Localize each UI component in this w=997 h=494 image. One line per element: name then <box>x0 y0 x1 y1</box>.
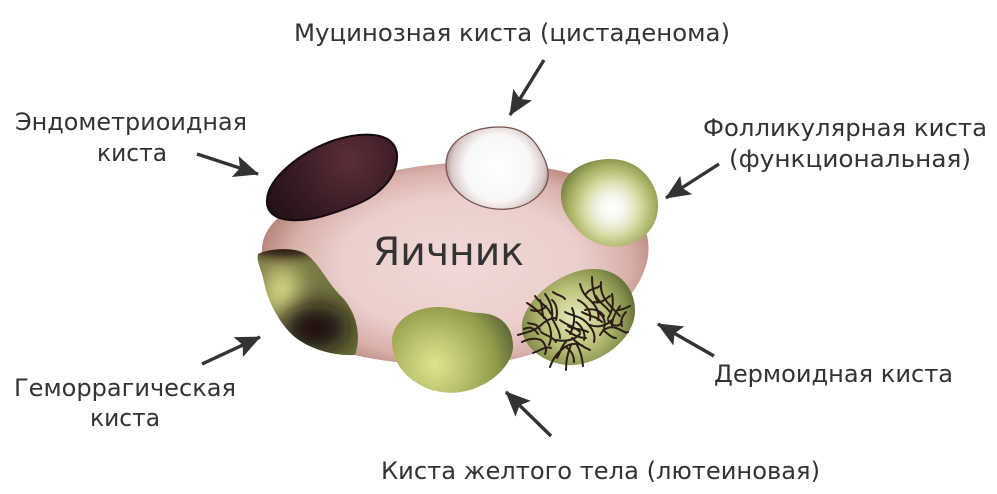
label: mucinous cyst: Муцинозная киста (цистаденома) <box>294 19 730 47</box>
label: endometrioid cyst: Эндометриоидная <box>15 108 247 136</box>
label: hemorrhagic cyst: Геморрагическая <box>14 374 236 402</box>
label: hemorrhagic cyst <box>14 374 236 432</box>
label: follicular cyst: (функциональная) <box>729 145 971 173</box>
cyst: corpus luteum <box>392 307 513 393</box>
label: follicular cyst <box>703 114 987 173</box>
arrow: hemorrhagic <box>202 337 260 364</box>
label: endometrioid cyst <box>15 108 247 167</box>
arrow: mucinous <box>510 60 544 115</box>
label: ovary: Яичник <box>373 230 524 275</box>
cyst: dermoid <box>518 269 635 370</box>
dermoid hair <box>518 277 630 370</box>
label: hemorrhagic cyst: киста <box>90 404 160 432</box>
arrow: follicular <box>666 164 719 198</box>
cyst: endometrioid <box>267 135 397 220</box>
label: corpus luteum cyst: Киста желтого тела (лютеиновая) <box>381 457 820 485</box>
arrow: endometrioid <box>197 154 258 174</box>
ovary body <box>262 162 649 367</box>
cyst: follicular <box>561 159 658 247</box>
label: dermoid cyst: Дермоидная киста <box>714 360 953 388</box>
arrow: corpus luteum <box>506 392 551 436</box>
cyst: hemorrhagic <box>258 249 358 356</box>
arrow: dermoid <box>658 324 714 356</box>
cyst: mucinous <box>446 127 548 209</box>
label: endometrioid cyst: киста <box>97 139 167 167</box>
label: follicular cyst: Фолликулярная киста <box>703 114 987 142</box>
